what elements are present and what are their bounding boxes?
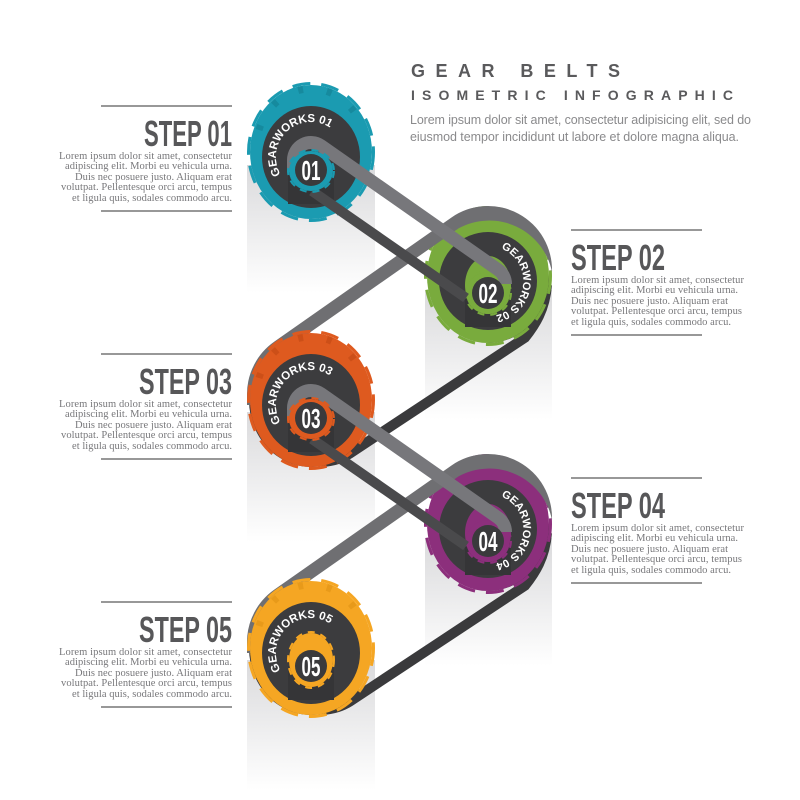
hub 01 [288, 150, 334, 192]
step 01: volutpat. Pellentesque orci arcu, tempus [61, 182, 232, 193]
hub 01: 01 [302, 155, 320, 186]
hub 04: 04 [478, 526, 498, 557]
step 02 [571, 230, 744, 335]
step 01: STEP 01 [144, 113, 232, 154]
step 01: Duis nec posuere justo. Aliquam erat [75, 172, 232, 183]
step 02: adipiscing elit. Morbi eu vehicula urna. [571, 285, 738, 296]
title: GEAR BELTS [411, 61, 620, 81]
gear shadows [247, 165, 552, 790]
step 05: adipiscing elit. Morbi eu vehicula urna. [65, 657, 232, 668]
title [411, 61, 733, 103]
step 04 [571, 478, 744, 583]
inner belts: gear 3 to gear 4 [294, 391, 506, 546]
long belt: gear 4 to gear 5 [247, 454, 552, 653]
step 01: Lorem ipsum dolor sit amet, consectetur [59, 151, 232, 162]
gear 05: GEARWORKS 05 [268, 610, 334, 672]
dark belt: gear 4 to gear 5 [254, 524, 547, 710]
step 01: et ligula quis, sodales commodo arcu. [72, 193, 232, 204]
step 05 [59, 602, 232, 707]
gear 01 [247, 82, 375, 222]
title: ISOMETRIC INFOGRAPHIC [411, 87, 733, 103]
step 03: Duis nec posuere justo. Aliquam erat [75, 420, 232, 431]
step 05: STEP 05 [139, 609, 232, 650]
step 03: adipiscing elit. Morbi eu vehicula urna. [65, 409, 232, 420]
step 05: et ligula quis, sodales commodo arcu. [72, 689, 232, 700]
step 05: volutpat. Pellentesque orci arcu, tempus [61, 678, 232, 689]
hub 03: 03 [302, 403, 320, 434]
intro text [410, 113, 751, 144]
step 04: Lorem ipsum dolor sit amet, consectetur [571, 523, 744, 534]
step 02: Duis nec posuere justo. Aliquam erat [571, 296, 728, 307]
hub 05: 05 [302, 651, 320, 682]
step 02: et ligula quis, sodales commodo arcu. [571, 317, 731, 328]
intro text: Lorem ipsum dolor sit amet, consectetur adipisicing elit, sed do [410, 113, 751, 127]
hub 04 [472, 525, 504, 557]
step 05: Lorem ipsum dolor sit amet, consectetur [59, 647, 232, 658]
dark belt: gear 2 to gear 3 [254, 276, 547, 462]
step 04: Duis nec posuere justo. Aliquam erat [571, 544, 728, 555]
step 02: Lorem ipsum dolor sit amet, consectetur [571, 275, 744, 286]
gear 03 [247, 330, 375, 470]
gear 02: GEARWORKS 02 [496, 243, 532, 322]
hub 02: 02 [478, 278, 498, 309]
gear 01: GEARWORKS 01 [268, 114, 332, 176]
hub 03 [288, 398, 334, 440]
inner belts: gear 1 to gear 2 [294, 143, 506, 298]
step 04: volutpat. Pellentesque orci arcu, tempus [571, 554, 742, 565]
step 03: volutpat. Pellentesque orci arcu, tempus [61, 430, 232, 441]
step 03: Lorem ipsum dolor sit amet, consectetur [59, 399, 232, 410]
step 02: STEP 02 [571, 237, 665, 278]
step 04: et ligula quis, sodales commodo arcu. [571, 565, 731, 576]
step 04: STEP 04 [571, 485, 665, 526]
step 02: volutpat. Pellentesque orci arcu, tempus [571, 306, 742, 317]
gear 03: GEARWORKS 03 [268, 362, 333, 424]
hub 05 [288, 632, 334, 688]
step 03: STEP 03 [139, 361, 232, 402]
step 01 [59, 106, 232, 211]
gear 02 [424, 206, 552, 346]
step 01: adipiscing elit. Morbi eu vehicula urna. [65, 161, 232, 172]
gear 04 [424, 454, 552, 594]
long belt: gear 2 to gear 3 [247, 206, 552, 405]
step 03 [59, 354, 232, 459]
gear 05 [247, 578, 375, 718]
gear 04: GEARWORKS 04 [496, 491, 532, 570]
step 04: adipiscing elit. Morbi eu vehicula urna. [571, 533, 738, 544]
step 03: et ligula quis, sodales commodo arcu. [72, 441, 232, 452]
step 05: Duis nec posuere justo. Aliquam erat [75, 668, 232, 679]
hub 02 [472, 277, 504, 309]
intro text: eiusmod tempor incididunt ut labore et dolore magna aliqua. [410, 130, 739, 144]
